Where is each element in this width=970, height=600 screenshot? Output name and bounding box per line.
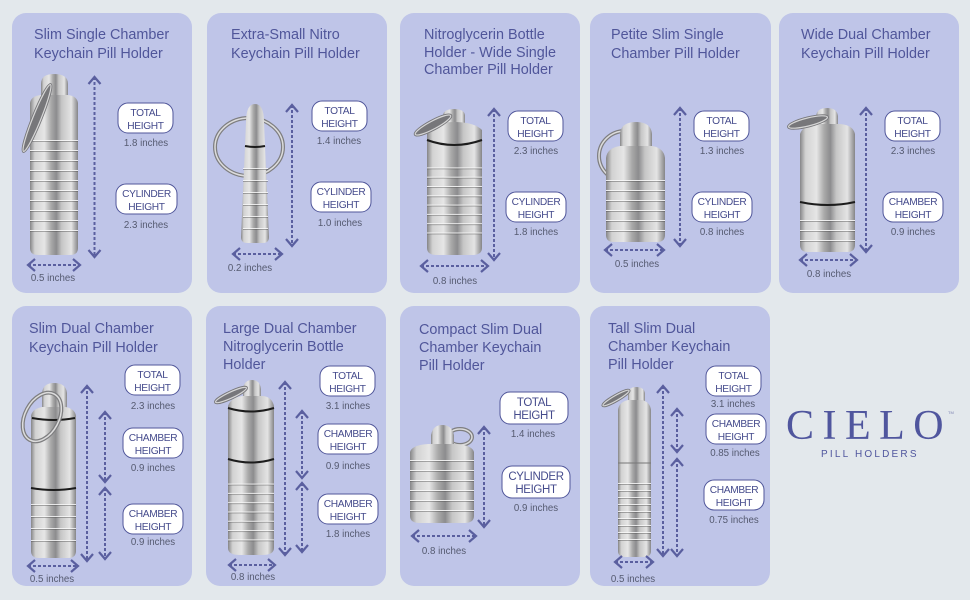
- label: total height: TOTAL: [130, 108, 161, 119]
- label: total height: [118, 103, 173, 149]
- heading: Tall Slim Dual: [608, 321, 695, 337]
- label: total height: TOTAL: [718, 371, 749, 382]
- label: cylinder height: HEIGHT: [515, 484, 557, 496]
- arrow: chamber height upper: [676, 409, 678, 452]
- arrow: height: [483, 427, 485, 527]
- arrow: chamber height lower: [301, 483, 303, 552]
- heading: Pill Holder: [608, 357, 674, 373]
- label: cylinder height: [506, 192, 566, 238]
- arrow: chamber height upper: [301, 411, 303, 478]
- label: width: 0.8 inches: [433, 276, 477, 287]
- panel: Petite Slim Single: [590, 13, 771, 293]
- label: chamber height: [123, 504, 183, 548]
- label: chamber height: CHAMBER: [889, 197, 937, 208]
- arrow: width: [412, 535, 476, 537]
- arrow: width: [800, 259, 857, 261]
- logo: Cielo Pill Holders: TM: [948, 410, 954, 415]
- label: chamber height: 0.9 inches: [326, 461, 370, 472]
- arrow: chamber height lower: [104, 488, 106, 559]
- label: chamber height: [706, 414, 766, 459]
- panel: Slim Dual Chamber: [12, 306, 192, 586]
- arrow: width: [229, 564, 275, 566]
- label: cylinder height: 0.9 inches: [514, 503, 558, 514]
- label: width: 0.8 inches: [231, 572, 275, 583]
- label: total height: [312, 101, 367, 147]
- label: total height: [500, 392, 568, 440]
- arrow: height: [679, 108, 681, 246]
- label: chamber height: HEIGHT: [330, 512, 366, 523]
- label: width: 0.5 inches: [30, 574, 74, 585]
- label: width: 0.8 inches: [422, 546, 466, 557]
- label: total height: TOTAL: [517, 397, 551, 409]
- label: chamber height: CHAMBER: [324, 429, 372, 440]
- label: total height: 2.3 inches: [514, 146, 558, 157]
- label: chamber height: CHAMBER: [710, 485, 758, 496]
- label: chamber height: 0.9 inches: [131, 537, 175, 548]
- arrow: total height: [284, 382, 286, 555]
- arrow: width: [615, 561, 653, 563]
- label: total height: TOTAL: [137, 370, 168, 381]
- arrow: width: [233, 253, 282, 255]
- logo: Cielo Pill Holders: CIELO: [786, 403, 952, 449]
- icon: pill holder: [15, 383, 76, 558]
- label: chamber height: 0.9 inches: [131, 463, 175, 474]
- label: cylinder height: CYLINDER: [317, 187, 365, 198]
- arrow: width: [28, 565, 78, 567]
- icon: pill holder: [214, 380, 274, 555]
- icon: pill holder: [602, 387, 651, 557]
- icon: pill holder: [599, 122, 665, 242]
- arrow: height: [493, 109, 495, 260]
- label: chamber height: 0.9 inches: [891, 227, 935, 238]
- arrow: chamber height lower: [676, 459, 678, 556]
- heading: Keychain Pill Holder: [29, 340, 158, 356]
- label: total height: TOTAL: [897, 116, 928, 127]
- label: total height: HEIGHT: [715, 384, 752, 395]
- label: chamber height: [123, 428, 183, 474]
- logo: Cielo Pill Holders: PILL HOLDERS: [821, 449, 919, 460]
- panel: Extra-Small Nitro: [207, 13, 387, 293]
- heading: Pill Holder: [419, 358, 485, 374]
- arrow: height: [291, 105, 293, 246]
- heading: Large Dual Chamber: [223, 321, 357, 337]
- label: cylinder height: CYLINDER: [512, 197, 560, 208]
- label: total height: [508, 111, 563, 157]
- label: total height: [706, 366, 761, 410]
- heading: Chamber Keychain: [608, 339, 730, 355]
- arrow: chamber height upper: [104, 412, 106, 482]
- arrow: total height: [662, 386, 664, 556]
- heading: Keychain Pill Holder: [801, 46, 930, 62]
- label: cylinder height: [502, 466, 570, 514]
- label: chamber height: CHAMBER: [324, 499, 372, 510]
- label: cylinder height: 1.8 inches: [514, 227, 558, 238]
- heading: Chamber Keychain: [419, 340, 541, 356]
- icon: pill holder: [410, 425, 474, 523]
- label: total height: [694, 111, 749, 157]
- label: total height: 1.8 inches: [124, 138, 168, 149]
- label: cylinder height: 0.8 inches: [700, 227, 744, 238]
- label: total height: TOTAL: [706, 116, 737, 127]
- heading: Holder: [223, 357, 266, 373]
- label: chamber height: [883, 192, 943, 238]
- heading: Slim Dual Chamber: [29, 321, 154, 337]
- label: total height: 3.1 inches: [711, 399, 755, 410]
- label: width: 0.5 inches: [615, 259, 659, 270]
- label: chamber height: 1.8 inches: [326, 529, 370, 540]
- label: total height: HEIGHT: [513, 410, 555, 422]
- label: chamber height: HEIGHT: [716, 498, 752, 509]
- label: chamber height: CHAMBER: [129, 509, 177, 520]
- label: total height: 2.3 inches: [131, 401, 175, 412]
- panel: Compact Slim Dual: [400, 306, 580, 586]
- heading: Keychain Pill Holder: [34, 46, 163, 62]
- label: total height: HEIGHT: [127, 121, 164, 132]
- label: chamber height: [704, 480, 764, 526]
- label: total height: HEIGHT: [321, 119, 358, 130]
- label: width: 0.8 inches: [807, 269, 851, 280]
- label: cylinder height: CYLINDER: [508, 471, 564, 483]
- label: cylinder height: CYLINDER: [122, 189, 171, 200]
- label: cylinder height: HEIGHT: [323, 200, 359, 211]
- arrow: width: [605, 249, 664, 251]
- label: total height: [125, 365, 180, 412]
- label: cylinder height: [692, 192, 752, 238]
- label: cylinder height: HEIGHT: [518, 210, 554, 221]
- label: total height: HEIGHT: [703, 129, 740, 140]
- heading: Nitroglycerin Bottle: [223, 339, 344, 355]
- arrow: width: [421, 265, 488, 267]
- heading: Nitroglycerin Bottle: [424, 27, 545, 43]
- heading: Petite Slim Single: [611, 27, 724, 43]
- label: total height: 3.1 inches: [326, 401, 370, 412]
- label: cylinder height: HEIGHT: [128, 202, 165, 213]
- heading: Compact Slim Dual: [419, 322, 542, 338]
- panel: Large Dual Chamber: [206, 306, 386, 586]
- label: cylinder height: 2.3 inches: [124, 220, 168, 231]
- arrow: height: [865, 108, 867, 252]
- label: chamber height: [318, 424, 378, 472]
- heading: Holder - Wide Single: [424, 45, 556, 61]
- label: total height: TOTAL: [324, 106, 355, 117]
- label: total height: HEIGHT: [134, 383, 171, 394]
- label: cylinder height: [116, 184, 177, 231]
- label: chamber height: HEIGHT: [718, 432, 754, 443]
- panel: Slim Single Chamber: [12, 13, 192, 293]
- heading: Chamber Pill Holder: [424, 62, 553, 78]
- label: width: 0.2 inches: [228, 263, 272, 274]
- heading: Slim Single Chamber: [34, 27, 169, 43]
- label: chamber height: [318, 494, 378, 540]
- heading: Wide Dual Chamber: [801, 27, 931, 43]
- label: total height: 1.4 inches: [317, 136, 361, 147]
- heading: Keychain Pill Holder: [231, 46, 360, 62]
- heading: Extra-Small Nitro: [231, 27, 340, 43]
- label: total height: 1.3 inches: [700, 146, 744, 157]
- label: total height: HEIGHT: [329, 384, 366, 395]
- label: cylinder height: CYLINDER: [698, 197, 746, 208]
- label: total height: TOTAL: [332, 371, 363, 382]
- panel: Nitroglycerin Bottle Holder: [400, 13, 580, 293]
- label: width: 0.5 inches: [611, 574, 655, 585]
- panel: Tall Slim Dual: [590, 306, 770, 586]
- icon: pill holder: [215, 104, 283, 243]
- label: cylinder height: HEIGHT: [704, 210, 740, 221]
- icon: pill holder: [788, 108, 855, 252]
- label: total height: [320, 366, 375, 412]
- arrow: height: [94, 77, 96, 257]
- label: width: 0.5 inches: [31, 273, 75, 284]
- icon: pill holder: [20, 74, 78, 255]
- label: total height: 1.4 inches: [511, 429, 555, 440]
- arrow: width: [28, 264, 80, 266]
- label: chamber height: HEIGHT: [135, 522, 171, 533]
- label: total height: TOTAL: [520, 116, 551, 127]
- label: chamber height: 0.75 inches: [709, 515, 759, 526]
- label: chamber height: CHAMBER: [712, 419, 760, 430]
- label: chamber height: 0.85 inches: [710, 448, 760, 459]
- label: cylinder height: 1.0 inches: [318, 218, 362, 229]
- label: cylinder height: [311, 182, 371, 229]
- panel: Wide Dual Chamber: [779, 13, 959, 293]
- label: total height: HEIGHT: [894, 129, 931, 140]
- label: chamber height: HEIGHT: [330, 442, 366, 453]
- label: total height: 2.3 inches: [891, 146, 935, 157]
- label: chamber height: HEIGHT: [135, 446, 171, 457]
- icon: pill holder: [413, 109, 482, 255]
- label: chamber height: HEIGHT: [895, 210, 931, 221]
- label: total height: [885, 111, 940, 157]
- label: total height: HEIGHT: [517, 129, 554, 140]
- label: chamber height: CHAMBER: [129, 433, 177, 444]
- heading: Chamber Pill Holder: [611, 46, 740, 62]
- arrow: total height: [86, 386, 88, 561]
